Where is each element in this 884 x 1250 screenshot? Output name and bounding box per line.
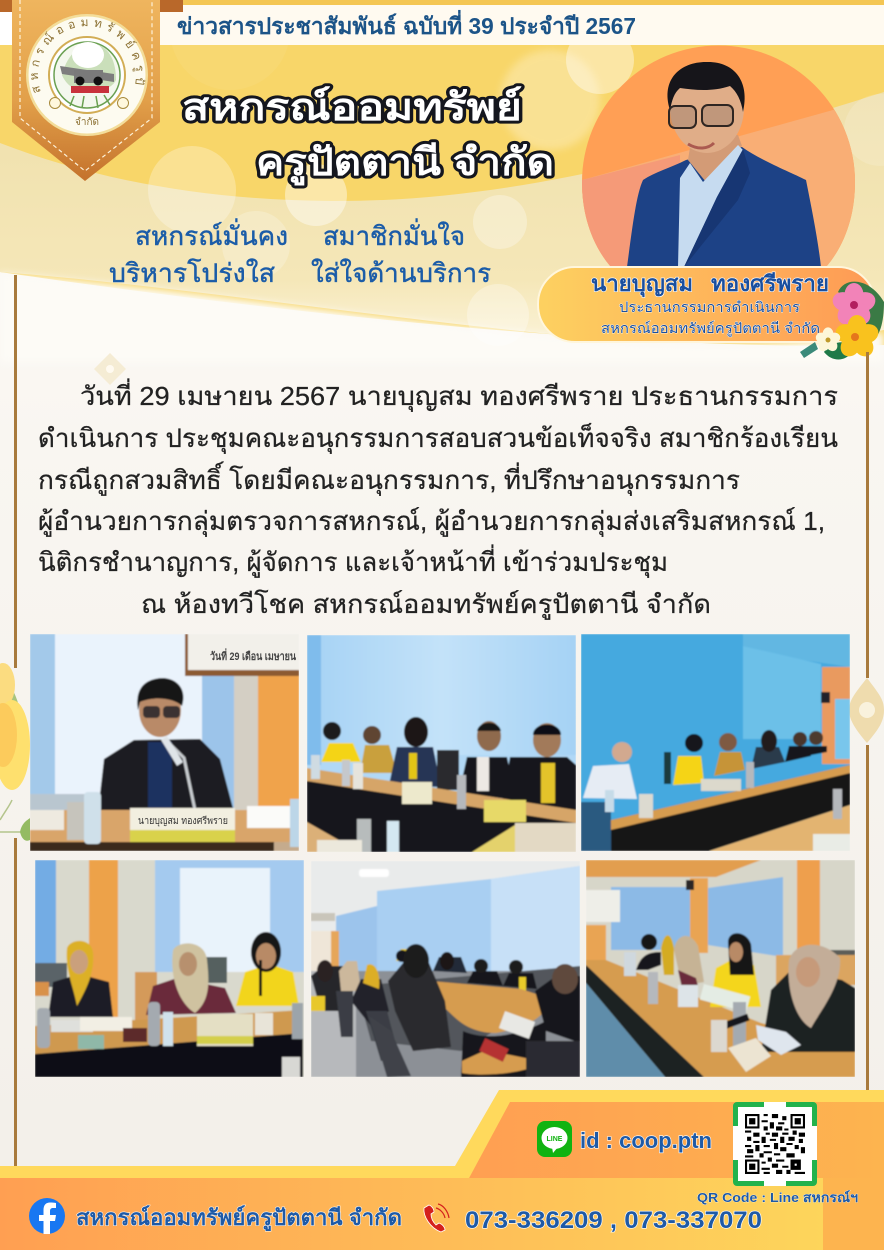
name plate bbox=[538, 267, 875, 342]
photo 5: meeting room bbox=[311, 862, 580, 1077]
panel: header background bbox=[0, 0, 884, 362]
portrait: president bbox=[582, 45, 860, 270]
photo 1: chairman speaking bbox=[30, 634, 299, 851]
mouth bbox=[688, 143, 714, 148]
body line 6: ณ ห้องทวีโชค สหกรณ์ออมทรัพย์ครูปัตตานี จำกัด bbox=[141, 589, 711, 620]
face bbox=[670, 86, 744, 153]
slogan 1: สหกรณ์มั่นคง bbox=[135, 218, 288, 251]
ornament: right bbox=[849, 678, 884, 743]
icon: phone bbox=[424, 1204, 449, 1232]
title line 1: สหกรณ์ออมทรัพย์ bbox=[182, 86, 522, 129]
phone numbers: 073-336209 , 073-337070 bbox=[465, 1207, 762, 1234]
slogan 3: บริหารโปร่งใส bbox=[109, 258, 275, 288]
slogan 2: สมาชิกมั่นใจ bbox=[323, 218, 465, 251]
photo 2: committee table bbox=[307, 635, 576, 852]
slogan bbox=[109, 218, 491, 288]
flowers bbox=[800, 282, 884, 360]
QR code bbox=[733, 1102, 817, 1186]
nameplate text: นายบุญสม ทองศรีพราย bbox=[138, 815, 228, 827]
logo emblem bbox=[26, 14, 148, 136]
LINE id: id : coop.ptn bbox=[580, 1128, 712, 1153]
body text bbox=[38, 378, 838, 620]
ornament: top bbox=[94, 353, 126, 385]
title bbox=[182, 86, 554, 186]
glasses bbox=[669, 105, 733, 128]
ribbon badge with logo bbox=[0, 0, 183, 181]
title line 2: ครูปัตตานี จำกัด bbox=[256, 142, 554, 186]
hair bbox=[668, 62, 745, 112]
slogan 4: ใส่ใจด้านบริการ bbox=[311, 258, 491, 288]
photo 6: close view along table bbox=[586, 860, 855, 1077]
panel: footer bbox=[0, 1090, 884, 1250]
jacket bbox=[627, 147, 821, 267]
icon: LINE bbox=[537, 1121, 572, 1157]
Facebook page name: สหกรณ์ออมทรัพย์ครูปัตตานี จำกัด bbox=[76, 1205, 402, 1232]
photo 4: three committee members bbox=[35, 860, 304, 1077]
icon: Facebook bbox=[29, 1198, 65, 1234]
position: ประธานกรรมการดำเนินการ bbox=[619, 299, 800, 315]
top strip bbox=[0, 0, 884, 45]
body line 4: ผู้อำนวยการกลุ่มตรวจการสหกรณ์, ผู้อำนวยการกลุ่มส่งเสริมสหกรณ์ 1, bbox=[38, 506, 825, 537]
logo bottom text: จำกัด bbox=[75, 117, 99, 128]
lapel bbox=[684, 149, 750, 267]
newsletter heading: ข่าวสารประชาสัมพันธ์ ฉบับที่ 39 ประจำปี 2567 bbox=[177, 9, 636, 39]
shirt bbox=[678, 145, 743, 267]
body line 3: กรณีถูกสวมสิทธิ์ โดยมีคณะอนุกรรมการ, ที่ปรึกษาอนุกรรมการ bbox=[38, 461, 740, 496]
body line 1: วันที่ 29 เมษายน 2567 นายบุญสม ทองศรีพราย ประธานกรรมการ bbox=[80, 378, 838, 412]
icon: LINE: LINE bbox=[547, 1136, 563, 1143]
frame lines bbox=[14, 275, 869, 1166]
organisation: สหกรณ์ออมทรัพย์ครูปัตตานี จำกัด bbox=[601, 320, 820, 337]
QR caption: QR Code : Line สหกรณ์ฯ bbox=[697, 1190, 858, 1205]
photo 3: wide view of meeting bbox=[581, 634, 850, 851]
body line 5: นิติกรชำนาญการ, ผู้จัดการ และเจ้าหน้าที่ เข้าร่วมประชุม bbox=[38, 544, 668, 578]
surname: ทองศรีพราย bbox=[711, 271, 829, 296]
body line 2: ดำเนินการ ประชุมคณะอนุกรรมการสอบสวนข้อเท็จจริง สมาชิกร้องเรียน bbox=[38, 422, 838, 454]
neck bbox=[688, 135, 742, 182]
flower: left bbox=[0, 663, 30, 841]
first name: นายบุญสม bbox=[591, 271, 693, 298]
